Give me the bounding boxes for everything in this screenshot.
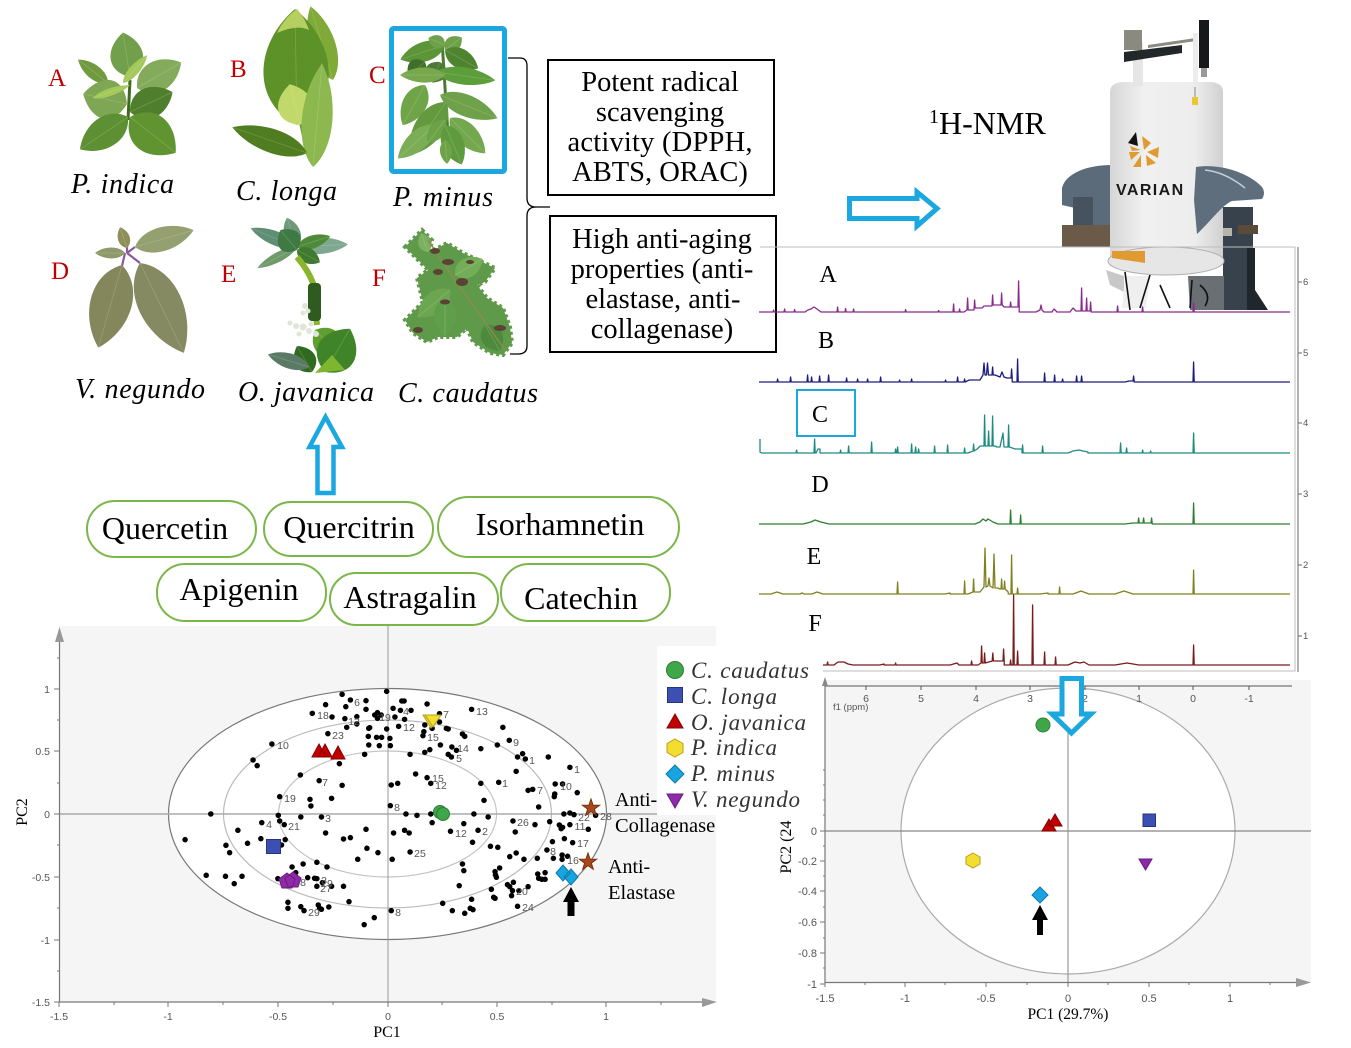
legend: C. longa [691, 684, 777, 709]
point numbers: 1 [574, 764, 580, 776]
NMR ppm axis over chart: 0 [1190, 693, 1196, 705]
compound pills: Isorhamnetin [476, 506, 644, 542]
point numbers: 8 [300, 877, 306, 889]
heading: 1H-NMR: H-NMR [939, 105, 1046, 141]
point numbers: 5 [456, 753, 462, 765]
point numbers: 22 [578, 812, 590, 824]
point numbers: 7 [537, 785, 543, 797]
arrow: P. minus in score plot [1032, 905, 1048, 935]
point numbers: 6 [354, 697, 360, 709]
callout: radical scavenging activity: activity (DPPH, [568, 127, 752, 158]
point numbers: 19 [379, 712, 391, 724]
point numbers: 4 [266, 819, 272, 831]
legend: P. minus [690, 761, 775, 786]
point numbers: 1 [502, 778, 508, 790]
point numbers: 27 [320, 883, 332, 895]
point numbers: 28 [600, 811, 612, 823]
legend: O. javanica [691, 710, 806, 735]
point numbers: 2 [482, 826, 488, 838]
plant C with highlight box: P. minus [391, 28, 504, 172]
chart: PCA biplot (left): -1.5 [50, 1011, 68, 1023]
plant letter labels: B [230, 56, 247, 83]
NMR ppm axis over chart: 6 [863, 693, 869, 705]
NMR spectra frame and axis: 3 [1303, 489, 1308, 500]
compound pills: Quercetin [102, 510, 228, 546]
chart: PCA score plot (right): -0.8 [798, 948, 817, 960]
label: anti-elastase: Anti- [608, 856, 650, 878]
point numbers: 4 [403, 706, 409, 718]
point numbers: 8 [394, 802, 400, 814]
chart: PCA biplot (left): -1.5 [32, 997, 50, 1009]
callout: anti-aging properties: properties (anti- [571, 254, 753, 285]
spectrum F [823, 595, 1290, 665]
highlight box around spectrum C [797, 390, 855, 436]
point numbers: 21 [288, 821, 300, 833]
chart: PCA biplot (left): -0.5 [269, 1011, 287, 1023]
species names: V. negundo [75, 374, 205, 405]
plant E: O. javanica [248, 215, 367, 382]
chart: PCA biplot (left): -0.5 [32, 872, 50, 884]
arrow: spectra to PCA [1052, 678, 1091, 733]
callout: anti-aging properties [550, 216, 776, 352]
point numbers: 25 [414, 848, 426, 860]
NMR ppm axis over chart: 4 [973, 693, 979, 705]
point numbers: 26 [517, 817, 529, 829]
plant letter labels: E [221, 261, 236, 288]
chart: PCA score plot (right): 0 [811, 826, 817, 838]
arrow: compounds to plants [310, 417, 342, 493]
chart: PCA biplot (left): PC2 [14, 798, 31, 826]
NMR ppm axis over chart: 3 [1027, 693, 1033, 705]
species names: P. minus [392, 182, 493, 213]
NMR ppm axis over chart: 5 [918, 693, 924, 705]
chart: PCA score plot (right): PC1 (29.7%) [1028, 1006, 1108, 1023]
spectrum labels: E [807, 544, 821, 570]
chart: PCA score plot (right): 0 [1065, 993, 1071, 1005]
callout: radical scavenging activity [548, 60, 774, 195]
label: anti-elastase [608, 856, 675, 904]
compound pills: Astragalin [343, 579, 477, 615]
NMR ppm axis over chart: 1 [1136, 693, 1142, 705]
chart: PCA biplot (left): -1 [41, 935, 50, 947]
plant D: V. negundo [78, 219, 203, 362]
spectrum D [759, 503, 1290, 524]
spectrum C [760, 415, 1290, 453]
plant letter labels [48, 56, 386, 292]
callout: anti-aging properties: elastase, anti- [585, 284, 741, 315]
point numbers: 11 [575, 821, 586, 833]
plant B: C. longa [228, 3, 345, 168]
point numbers: 17 [577, 838, 589, 850]
species names [70, 169, 538, 409]
NMR ppm axis over chart: 2 [1082, 693, 1088, 705]
spectrum labels: A [819, 262, 837, 288]
NMR spectrometer machine [1062, 20, 1268, 310]
legend: V. negundo [691, 787, 800, 812]
point numbers: 8 [550, 846, 556, 858]
plant letter labels: C [369, 62, 386, 89]
label: anti-collagenase [615, 789, 715, 837]
spectrum A [759, 281, 1290, 312]
NMR spectra frame and axis: 6 [1303, 277, 1308, 288]
point numbers: 1 [529, 755, 535, 767]
point numbers: 9 [513, 737, 519, 749]
spectrum labels: B [818, 328, 834, 354]
arrow: plants to NMR [850, 192, 937, 226]
spectrum labels: F [808, 611, 822, 637]
legend: P. indica [690, 735, 777, 760]
chart: PCA score plot (right) [778, 677, 1311, 1023]
callout: radical scavenging activity: ABTS, ORAC) [572, 157, 748, 188]
point numbers: 14 [457, 743, 469, 755]
point numbers: 10 [277, 740, 289, 752]
spectrum B [759, 359, 1290, 382]
point numbers: 8 [395, 907, 401, 919]
point numbers: 23 [332, 730, 344, 742]
point numbers: 12 [435, 780, 447, 792]
point numbers [266, 697, 612, 919]
point numbers: 3 [325, 813, 331, 825]
chart: PCA biplot (left): -1 [163, 1011, 173, 1023]
label: anti-collagenase: Collagenase [615, 815, 715, 837]
spectrum labels: C [812, 402, 828, 428]
chart: PCA biplot (left): 0 [385, 1011, 391, 1023]
chart: PCA biplot (left): 0.5 [35, 746, 50, 758]
plant A: P. indica [71, 30, 189, 168]
chart: PCA biplot (left): 0.5 [490, 1011, 504, 1023]
compound pills [87, 497, 679, 625]
NMR spectrometer machine: VARIAN [1116, 182, 1185, 199]
species names: C. caudatus [398, 378, 538, 409]
point numbers: 19 [284, 793, 296, 805]
NMR spectra frame and axis: 5 [1303, 348, 1308, 359]
point numbers: 7 [322, 777, 328, 789]
plant letter labels: F [372, 265, 386, 292]
chart: PCA score plot (right): -1.5 [816, 993, 834, 1005]
NMR spectra frame and axis: 4 [1303, 418, 1308, 429]
point numbers: 13 [476, 706, 488, 718]
label: anti-elastase: Elastase [608, 882, 675, 904]
heading: 1H-NMR: 1 [929, 106, 939, 128]
species names: O. javanica [238, 377, 374, 408]
point numbers: 16 [567, 855, 579, 867]
chart: PCA score plot (right): -0.4 [798, 886, 817, 898]
point numbers: 12 [348, 716, 360, 728]
point numbers: 15 [427, 732, 439, 744]
chart: PCA biplot (left): 0 [44, 809, 50, 821]
point numbers: 29 [308, 907, 320, 919]
chart: PCA score plot (right): -1 [807, 979, 817, 991]
NMR spectra frame and axis [760, 247, 1308, 672]
Varian logo [1128, 132, 1159, 167]
point numbers: 18 [317, 710, 329, 722]
spectrum labels: D [811, 472, 829, 498]
callout: anti-aging properties: High anti-aging [572, 224, 752, 255]
chart: PCA biplot (left): 1 [603, 1011, 609, 1023]
chart: PCA biplot (left): 1 [44, 684, 50, 696]
spectrum labels [807, 262, 837, 637]
species names: P. indica [70, 169, 174, 200]
point numbers: 29 [321, 878, 333, 890]
plant letter labels: A [48, 65, 66, 92]
plant F: C. caudatus [405, 230, 512, 356]
plant letter labels: D [51, 258, 69, 285]
point numbers: 7 [443, 709, 449, 721]
chart: PCA score plot (right): -1 [900, 993, 910, 1005]
chart: PCA score plot (right): -0.2 [798, 856, 817, 868]
bracket grouping plants [508, 58, 550, 354]
chart: PCA score plot (right): PC2 (24 [778, 821, 795, 873]
legend: C. caudatus [691, 658, 809, 683]
NMR spectra frame and axis: 2 [1303, 560, 1308, 571]
chart: PCA score plot (right): -0.5 [977, 993, 995, 1005]
sample markers [266, 715, 600, 888]
point numbers: 20 [516, 886, 528, 898]
legend [657, 646, 817, 815]
spectrum E [759, 548, 1290, 594]
compound pills: Quercitrin [283, 509, 415, 545]
NMR spectra frame and axis: 1 [1303, 631, 1308, 642]
point numbers: 12 [455, 828, 467, 840]
NMR ppm axis over chart: -1 [1244, 693, 1254, 705]
chart: PCA score plot (right): 1 [1227, 993, 1233, 1005]
point numbers: 12 [403, 722, 415, 734]
variable points [185, 691, 596, 925]
point numbers: 15 [432, 773, 444, 785]
callout: radical scavenging activity: Potent radical [581, 67, 739, 98]
point numbers: 3 [321, 875, 327, 887]
label: anti-collagenase: Anti- [615, 789, 657, 811]
callout: radical scavenging activity: scavenging [596, 97, 724, 128]
NMR ppm axis over chart [822, 677, 1292, 713]
chart: PCA biplot (left): PC1 [373, 1024, 401, 1041]
compound pills: Apigenin [179, 571, 299, 607]
species names: C. longa [236, 176, 337, 207]
compound pills: Catechin [524, 580, 638, 616]
NMR ppm axis over chart: f1 (ppm) [833, 702, 868, 713]
callout: anti-aging properties: collagenase) [591, 314, 733, 345]
chart: PCA biplot (left) [14, 626, 717, 1041]
chart: PCA score plot (right): 0.5 [1141, 993, 1157, 1005]
chart: PCA score plot (right): -0.6 [798, 917, 817, 929]
point numbers: 24 [522, 902, 534, 914]
score markers [966, 718, 1156, 903]
arrow: P. minus in biplot [563, 887, 579, 916]
point numbers: 10 [560, 781, 572, 793]
